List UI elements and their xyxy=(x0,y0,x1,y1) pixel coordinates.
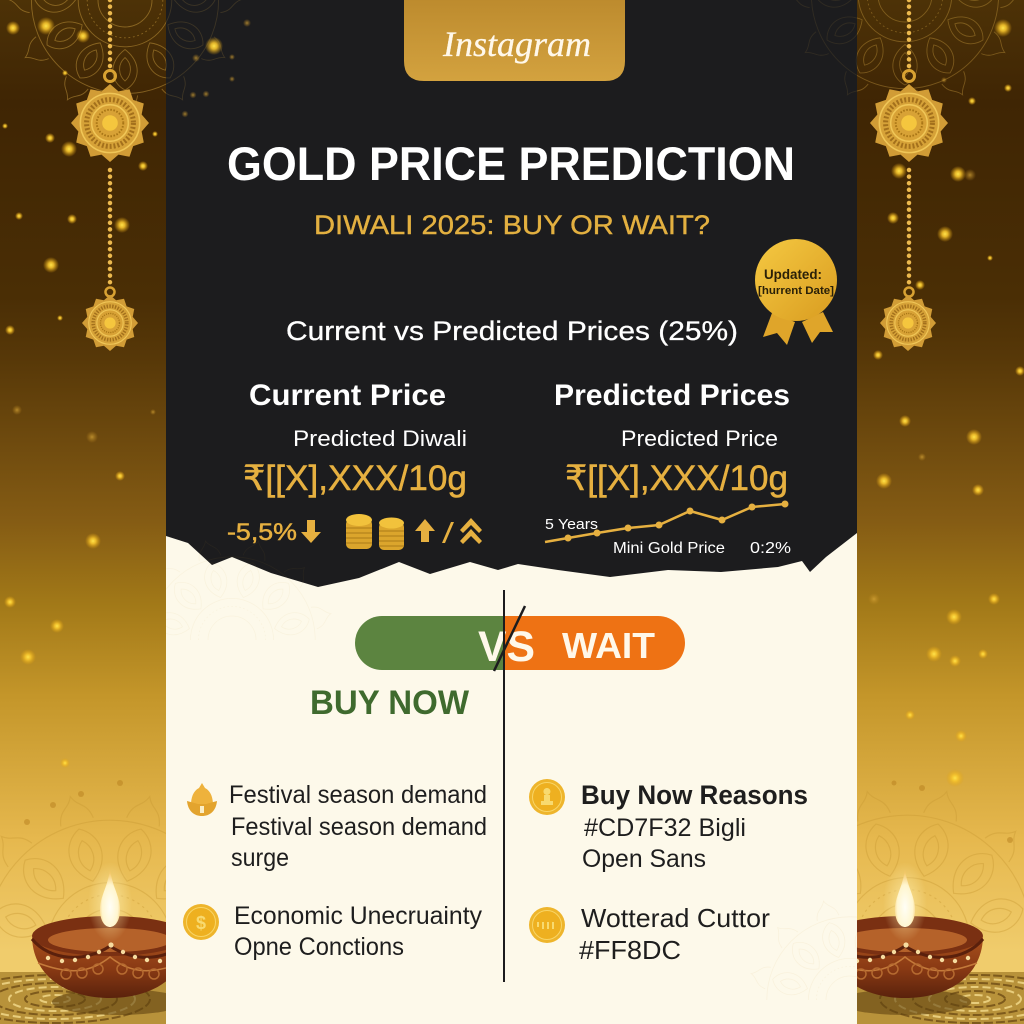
predicted prices column: Predicted Price xyxy=(621,426,778,451)
list: left column: Festival season demand xyxy=(229,781,487,809)
list: right column: #FF8DC xyxy=(579,935,681,965)
list: right column: Wotterad Cuttor xyxy=(581,903,770,933)
title: GOLD PRICE PREDICTION xyxy=(227,137,795,190)
list: right column xyxy=(529,779,808,965)
current price column: Current Price xyxy=(249,379,446,412)
list: left column: Economic Unecruainty xyxy=(234,902,482,930)
left hanging ornament xyxy=(71,0,149,351)
icon: coin xyxy=(529,907,565,943)
list: left column: surge xyxy=(231,844,289,872)
list: left column: Opne Conctions xyxy=(234,933,404,961)
icon: gold pot xyxy=(187,783,217,816)
central divider xyxy=(494,590,525,982)
list: left column xyxy=(183,781,487,961)
list: right column: Buy Now Reasons xyxy=(581,780,808,810)
patterned floor left xyxy=(0,972,184,1024)
line chart: mini gold price: 5 Years xyxy=(545,516,598,533)
predicted prices column: ₹[[X],XXX/10g xyxy=(565,459,788,498)
current price column: Predicted Diwali xyxy=(293,426,467,451)
VS pill xyxy=(355,616,685,671)
icon: coin xyxy=(183,904,219,940)
VS pill: VS xyxy=(478,623,535,671)
change indicator: -5,5% xyxy=(227,519,297,546)
badge: updated date xyxy=(755,239,837,345)
icon: coin: $ xyxy=(196,913,206,933)
dim sparkles xyxy=(12,19,976,605)
subtitle: DIWALI 2025: BUY OR WAIT? xyxy=(314,210,710,240)
panel: dark header xyxy=(166,0,857,590)
icon: right diya lamp xyxy=(857,867,984,998)
line chart: mini gold price: 0:2% xyxy=(750,540,791,557)
list: right column: Open Sans xyxy=(582,845,706,873)
list: left column: Festival season demand xyxy=(231,813,487,841)
current price column: ₹[[X],XXX/10g xyxy=(243,459,467,498)
line chart: mini gold price xyxy=(545,500,791,557)
VS pill: WAIT xyxy=(562,625,655,666)
badge: updated date: [hurrent Date] xyxy=(758,285,834,297)
panel: cream lower section xyxy=(166,533,857,1024)
Instagram tab xyxy=(404,0,625,81)
icon: coin xyxy=(529,779,565,815)
Instagram tab: Instagram xyxy=(442,24,591,64)
section heading: Current vs Predicted Prices (25%) xyxy=(286,316,738,346)
change indicator xyxy=(227,519,321,546)
icon: up arrow and chevrons xyxy=(415,518,482,544)
icon: coin stacks xyxy=(346,514,404,550)
right hanging ornament xyxy=(870,0,948,351)
brown dots above lower mandalas xyxy=(24,780,1013,843)
badge: updated date: Updated: xyxy=(764,267,822,282)
icon: left diya lamp xyxy=(30,867,166,998)
predicted prices column xyxy=(554,379,790,498)
line chart: mini gold price: Mini Gold Price xyxy=(613,540,725,557)
sparkles xyxy=(2,17,1024,787)
patterned floor right xyxy=(839,972,1024,1024)
list: right column: #CD7F32 Bigli xyxy=(584,814,746,842)
current price column xyxy=(227,379,482,550)
heading: buy now: BUY NOW xyxy=(310,684,470,722)
predicted prices column: Predicted Prices xyxy=(554,379,790,412)
